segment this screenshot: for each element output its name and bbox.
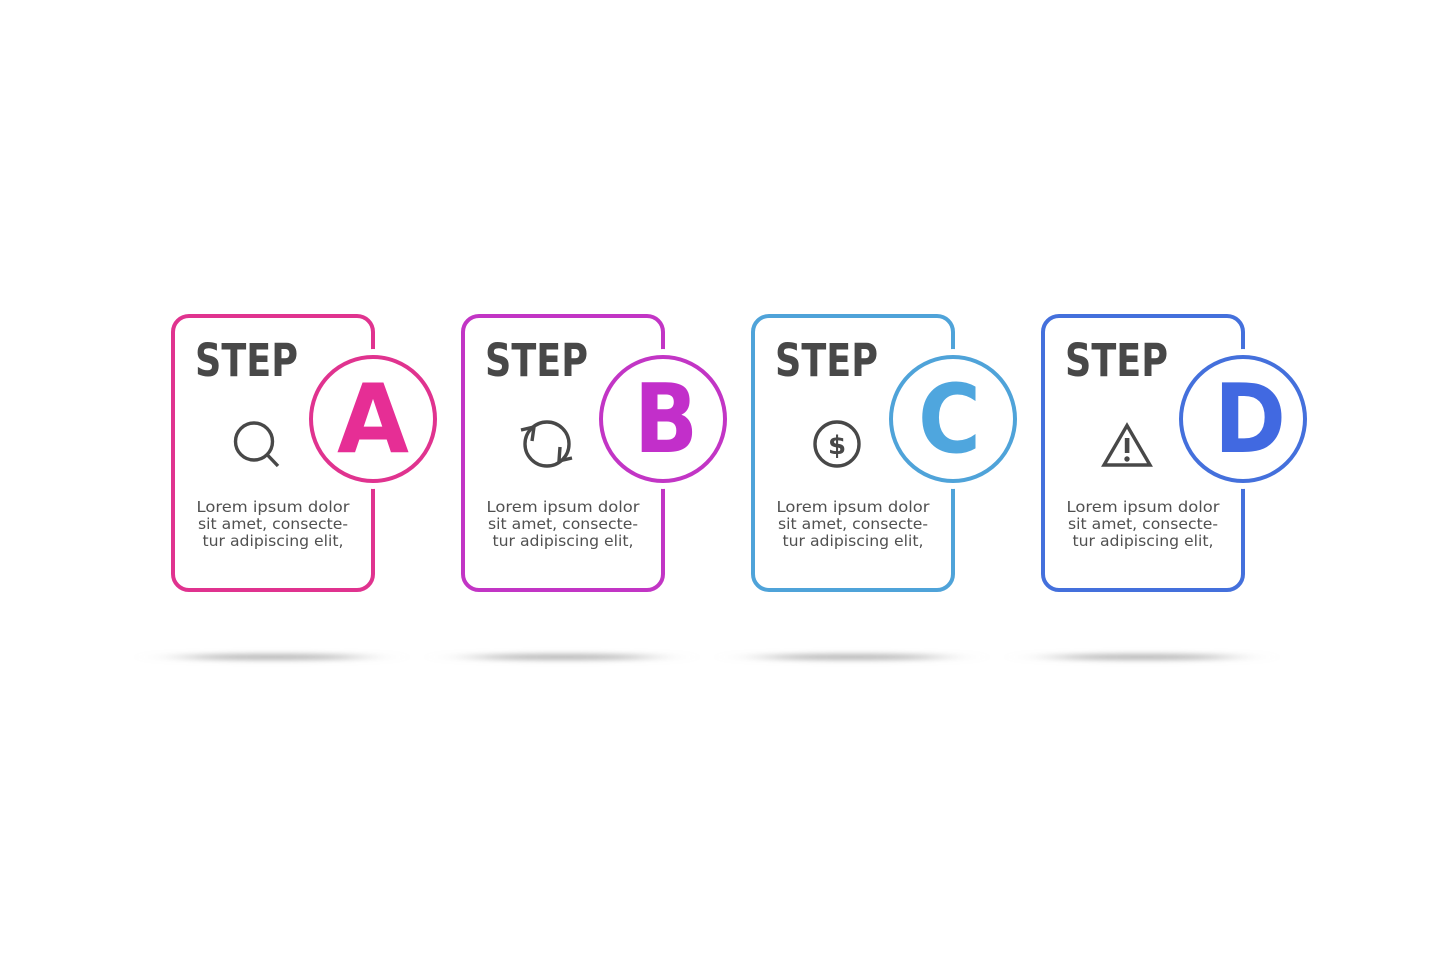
shadow B [470, 654, 654, 660]
heading C: STEP [775, 334, 878, 387]
step B [463, 316, 733, 660]
shadow C [760, 654, 944, 660]
icon: dollar coin [815, 422, 859, 466]
text D: sit amet, consecte- [1068, 515, 1218, 533]
heading A: STEP [195, 334, 298, 387]
step A [173, 316, 443, 660]
badge C: C [918, 365, 981, 475]
text B: sit amet, consecte- [488, 515, 638, 533]
step C [753, 316, 1023, 660]
badge B [593, 349, 733, 489]
text A: tur adipiscing elit, [202, 532, 344, 550]
icon: dollar coin: $ [828, 431, 846, 461]
badge B: B [634, 365, 698, 475]
shadow A [180, 654, 364, 660]
step D [1043, 316, 1313, 660]
text B: tur adipiscing elit, [492, 532, 634, 550]
text C: Lorem ipsum dolor [776, 498, 930, 516]
icon: warning triangle [1104, 426, 1150, 465]
text A [196, 498, 350, 550]
text B: Lorem ipsum dolor [486, 498, 640, 516]
icon: cycle arrows [521, 422, 572, 466]
card C [753, 316, 953, 590]
text D: tur adipiscing elit, [1072, 532, 1214, 550]
badge A [303, 349, 443, 489]
card B [463, 316, 663, 590]
text D: Lorem ipsum dolor [1066, 498, 1220, 516]
icon: magnifier [236, 423, 278, 466]
card A [173, 316, 373, 590]
badge D: D [1214, 365, 1286, 475]
text C [776, 498, 930, 550]
text D [1066, 498, 1220, 550]
shadow D [1050, 654, 1234, 660]
badge D [1173, 349, 1313, 489]
heading D: STEP [1065, 334, 1168, 387]
text C: tur adipiscing elit, [782, 532, 924, 550]
card D [1043, 316, 1243, 590]
text C: sit amet, consecte- [778, 515, 928, 533]
heading B: STEP [485, 334, 588, 387]
badge A: A [337, 365, 409, 475]
text B [486, 498, 640, 550]
text A: sit amet, consecte- [198, 515, 348, 533]
text A: Lorem ipsum dolor [196, 498, 350, 516]
badge C [883, 349, 1023, 489]
